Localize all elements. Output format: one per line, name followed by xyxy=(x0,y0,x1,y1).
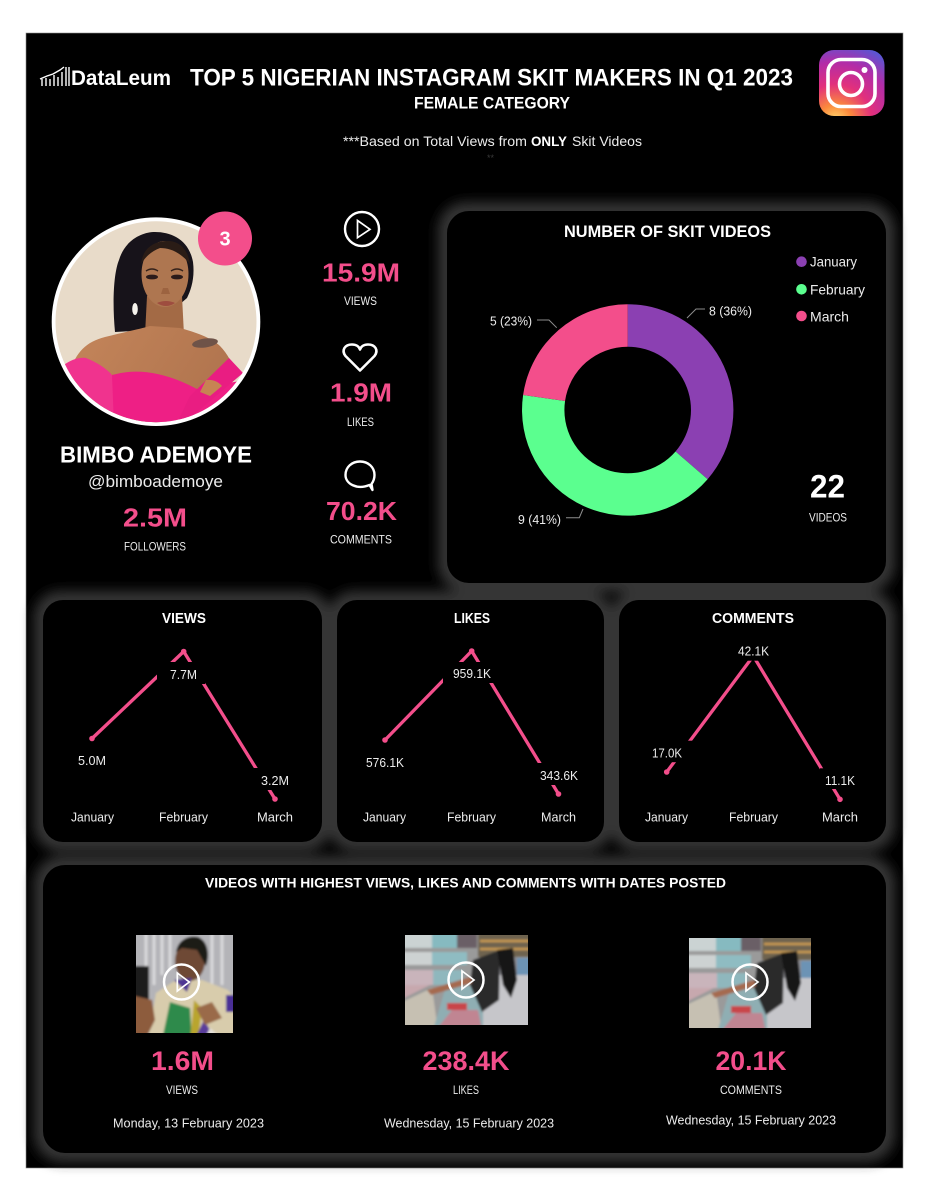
icon: play xyxy=(732,964,768,1000)
video: highest comments xyxy=(666,933,836,1128)
month axis: March xyxy=(822,810,858,824)
profile xyxy=(50,212,262,554)
icon: play xyxy=(448,962,484,998)
note: based on total views: ONLY xyxy=(531,133,568,149)
stat: views: VIEWS xyxy=(344,294,377,308)
value labels: 343.6K xyxy=(540,768,578,783)
metric label: LIKES xyxy=(453,1083,479,1097)
faint asterisks: ** xyxy=(487,153,495,163)
icon: logo bars xyxy=(40,67,69,86)
line xyxy=(89,649,300,802)
value labels: 3.2M xyxy=(261,773,289,788)
month axis xyxy=(363,810,576,824)
handle: @bimboademoye xyxy=(88,473,223,491)
thumbnail xyxy=(689,938,811,1028)
note: based on total views xyxy=(343,133,642,149)
heading: VIDEOS WITH HIGHEST VIEWS, LIKES AND COMMENTS WITH DATES POSTED xyxy=(205,874,726,890)
value labels xyxy=(652,644,855,788)
month axis xyxy=(71,810,293,824)
month axis: January xyxy=(645,810,688,824)
icon: speech bubble xyxy=(346,462,374,490)
stat: views: 15.9M xyxy=(322,258,400,288)
donut labels: 9 (41%) xyxy=(518,512,561,527)
month axis: March xyxy=(257,810,293,824)
date: Wednesday, 15 February 2023 xyxy=(384,1116,554,1130)
heading: VIEWS xyxy=(162,611,206,627)
followers label: FOLLOWERS xyxy=(124,540,186,554)
stat: views xyxy=(322,212,400,308)
value labels: 959.1K xyxy=(453,666,491,681)
date: Monday, 13 February 2023 xyxy=(113,1116,264,1130)
metric label: COMMENTS xyxy=(720,1083,782,1097)
panel: number of skit videos xyxy=(447,211,886,583)
panel glows xyxy=(34,202,895,1162)
icon: heart xyxy=(344,344,376,370)
video: highest views xyxy=(113,930,264,1130)
thumbnail xyxy=(405,935,528,1025)
stat: likes xyxy=(330,344,392,429)
value labels: 5.0M xyxy=(78,753,106,768)
value labels xyxy=(366,666,578,783)
legend: February xyxy=(810,282,865,298)
value labels xyxy=(78,667,289,788)
value: 238.4K xyxy=(422,1046,510,1076)
legend: January xyxy=(810,254,857,270)
header xyxy=(40,50,884,163)
note: based on total views: Skit Videos xyxy=(572,133,642,149)
legend: March xyxy=(810,308,849,324)
total videos xyxy=(809,468,847,524)
panel: likes line chart xyxy=(337,600,604,842)
logo: DataLeum: DataLeum xyxy=(71,67,171,90)
metric label: VIEWS xyxy=(166,1083,198,1097)
donut labels xyxy=(490,304,752,527)
video: highest likes xyxy=(384,930,554,1130)
stat: comments xyxy=(326,462,397,546)
stat: likes: 1.9M xyxy=(330,378,392,408)
stat: comments: COMMENTS xyxy=(330,532,392,546)
profile photo xyxy=(50,215,262,430)
value labels: 11.1K xyxy=(825,773,855,788)
key stats xyxy=(322,212,400,546)
month axis: February xyxy=(447,810,496,824)
icon: play xyxy=(345,212,379,246)
line xyxy=(645,640,862,802)
date: Wednesday, 15 February 2023 xyxy=(666,1112,836,1128)
stat: comments: 70.2K xyxy=(326,496,397,526)
heading: LIKES xyxy=(454,611,490,627)
value labels: 576.1K xyxy=(366,755,404,770)
note: based on total views: ***Based on Total Views from xyxy=(343,133,527,149)
name: BIMBO ADEMOYE xyxy=(60,442,252,468)
followers value: 2.5M xyxy=(123,502,187,532)
month axis: February xyxy=(729,810,778,824)
legend xyxy=(796,254,865,324)
panel: views line chart xyxy=(43,600,322,842)
title: TOP 5 NIGERIAN INSTAGRAM SKIT MAKERS IN Q1 2023 xyxy=(190,64,793,92)
donut chart xyxy=(522,304,733,516)
total videos: 22 xyxy=(810,468,845,504)
rank badge: 3 xyxy=(220,228,231,250)
panel: top videos xyxy=(43,865,886,1153)
month axis: March xyxy=(541,810,576,824)
value labels: 42.1K xyxy=(738,644,769,658)
icon: play xyxy=(164,964,199,1000)
total videos: VIDEOS xyxy=(809,510,847,524)
month axis: February xyxy=(159,810,208,824)
donut labels: 8 (36%) xyxy=(709,304,752,318)
value: 1.6M xyxy=(151,1046,214,1076)
stat: likes: LIKES xyxy=(347,415,374,429)
month axis: January xyxy=(71,810,114,824)
thumbnail xyxy=(136,935,233,1033)
value labels: 7.7M xyxy=(170,667,197,682)
line xyxy=(382,648,585,797)
value: 20.1K xyxy=(716,1046,787,1076)
panel: comments line chart xyxy=(619,600,886,842)
rank badge xyxy=(198,212,252,266)
donut labels: 5 (23%) xyxy=(490,314,532,328)
month axis xyxy=(645,810,858,824)
month axis: January xyxy=(363,810,406,824)
icon: instagram xyxy=(819,50,884,116)
heading: NUMBER OF SKIT VIDEOS xyxy=(564,223,771,241)
subtitle: FEMALE CATEGORY xyxy=(414,94,570,112)
heading: COMMENTS xyxy=(712,611,794,627)
value labels: 17.0K xyxy=(652,746,682,760)
